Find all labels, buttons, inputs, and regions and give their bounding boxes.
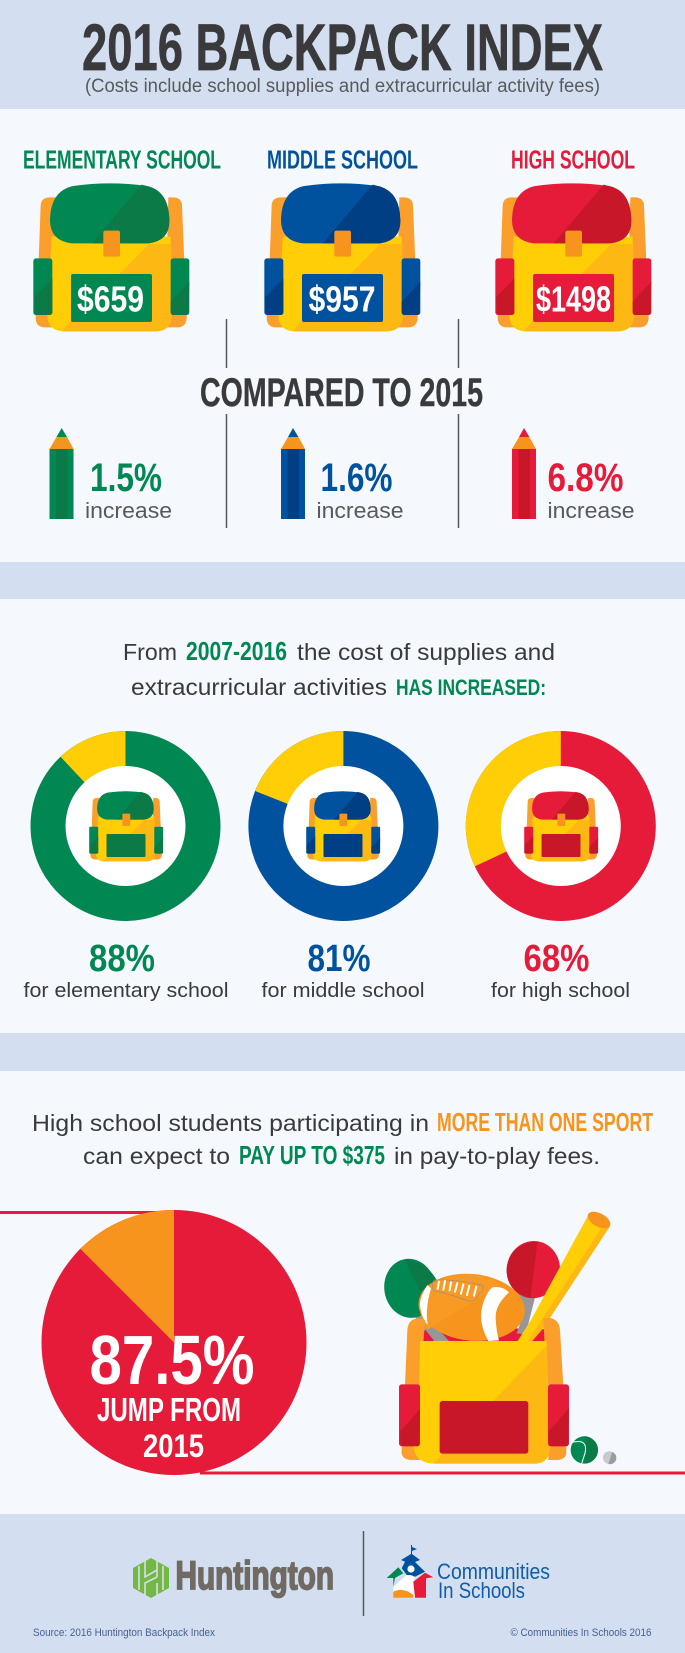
backpack label <box>440 1401 528 1454</box>
backpack: middle $957 <box>264 183 420 331</box>
intro text: sports fees: High school students participating in <box>32 1110 429 1136</box>
stat: 68% high: 68% <box>524 938 590 980</box>
backpack: high $1498 <box>495 183 651 331</box>
caption: increase <box>548 498 634 523</box>
icon: small ball <box>603 1451 616 1464</box>
icon: bat <box>518 1208 613 1342</box>
stat: 88% elementary: 88% <box>89 938 155 980</box>
icon: tennis ball <box>571 1436 598 1464</box>
subtitle: (Costs include school supplies and extracurricular activity fees) <box>85 76 600 97</box>
intro text: 2007-2016 increase: HAS INCREASED: <box>396 675 546 700</box>
pencil: middle 1.6% increase <box>281 428 404 523</box>
stat: 81% middle: for middle school <box>262 980 424 1002</box>
stat: 68% high <box>491 938 630 1002</box>
value: 6.8% <box>548 456 624 500</box>
logo: Communities In Schools <box>387 1545 550 1603</box>
logo: Huntington <box>133 1554 334 1598</box>
price label: $659 <box>77 278 144 320</box>
heading: compared to 2015: COMPARED TO 2015 <box>200 371 483 415</box>
backpack straps <box>402 1318 566 1460</box>
footer band <box>0 1514 685 1653</box>
backpack: elementary $659 <box>33 183 189 331</box>
stat: 88% elementary: for elementary school <box>24 980 228 1002</box>
price label: $957 <box>308 278 376 320</box>
stat: 88% elementary <box>24 938 228 1002</box>
pie chart: 87.5% jump from 2015 <box>42 1210 306 1475</box>
price label <box>533 274 614 322</box>
big percentage: 87.5% <box>90 1321 254 1399</box>
logo: Communities In Schools: Communities <box>437 1559 550 1584</box>
icon: backpack <box>524 791 598 861</box>
value: 1.5% <box>90 456 162 500</box>
icon: green paddle <box>380 1255 449 1341</box>
donut chart: high 68% <box>466 731 656 921</box>
stat: 81% middle: 81% <box>308 938 370 980</box>
header band <box>0 0 685 109</box>
illustration: backpack with sports gear <box>380 1208 616 1464</box>
heading: elementary school: ELEMENTARY SCHOOL <box>23 144 221 174</box>
donut chart: middle 81% <box>248 731 438 921</box>
logo: Communities In Schools: In Schools <box>438 1578 525 1603</box>
value: 1.6% <box>320 456 392 500</box>
stat: 68% high: for high school <box>491 980 630 1002</box>
logo: Huntington: Huntington <box>176 1554 334 1598</box>
intro text: sports fees: PAY UP TO $375 <box>239 1140 385 1170</box>
intro text: 2007-2016 increase: extracurricular activities <box>131 674 387 700</box>
donut chart: elementary 88% <box>30 731 220 921</box>
stat: 81% middle <box>262 938 424 1002</box>
caption line 1: JUMP FROM <box>97 1392 241 1429</box>
icon: football <box>415 1269 528 1346</box>
caption line 2: 2015 <box>143 1428 204 1464</box>
intro text: 2007-2016 increase: From <box>123 639 177 665</box>
intro text: sports fees: can expect to <box>83 1143 230 1169</box>
backpack body <box>413 1341 550 1464</box>
intro text: 2007-2016 increase: the cost of supplies and <box>297 639 555 665</box>
price label: $1498 <box>536 278 611 320</box>
icon: backpack <box>89 791 163 861</box>
pencil: high 6.8% increase <box>512 428 634 523</box>
heading: middle school: MIDDLE SCHOOL <box>267 144 418 174</box>
icon: red paddle <box>503 1238 564 1334</box>
intro text: 2007-2016 increase: 2007-2016 <box>186 636 287 666</box>
caption: increase <box>316 498 404 523</box>
caption: increase <box>85 498 172 523</box>
pencil: elementary 1.5% increase <box>50 428 172 523</box>
icon: backpack <box>306 791 380 861</box>
intro text: sports fees: in pay-to-play fees. <box>394 1143 600 1169</box>
source note: Source: 2016 Huntington Backpack Index <box>33 1627 215 1639</box>
intro text: 2007-2016 increase <box>123 636 555 700</box>
intro text: sports fees <box>32 1107 653 1170</box>
backpack pockets <box>399 1384 569 1446</box>
copyright note: © Communities In Schools 2016 <box>510 1627 652 1639</box>
